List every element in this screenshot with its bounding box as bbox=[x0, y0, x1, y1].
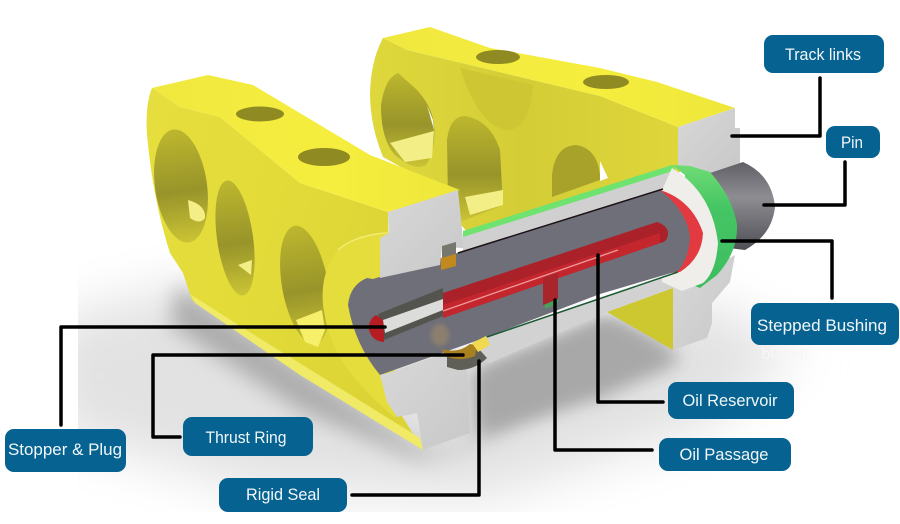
upper section block bbox=[380, 190, 463, 278]
lower bushing strip bbox=[467, 272, 708, 363]
pin section bbox=[348, 189, 690, 375]
front link side holes bbox=[147, 126, 215, 246]
stopper and plug bbox=[383, 299, 443, 333]
leader line: pin bbox=[764, 162, 845, 205]
pin top line bbox=[458, 189, 663, 253]
leader line: stepped bushing bbox=[722, 241, 832, 298]
label: Stepped Bushing bbox=[751, 303, 899, 345]
label: Track links: Track links bbox=[785, 45, 861, 64]
leader line: oil passage bbox=[555, 300, 652, 450]
label: Stopper and Plug bbox=[5, 429, 126, 472]
front link top holes bbox=[236, 106, 284, 122]
thrust ring bbox=[442, 344, 477, 359]
lower section block bbox=[380, 352, 470, 450]
red pin ring bbox=[660, 190, 703, 274]
right lower gray block bbox=[673, 255, 735, 350]
tan blur bbox=[431, 324, 449, 346]
back link side face bbox=[370, 38, 680, 235]
rigid seal bbox=[472, 336, 490, 352]
oil reservoir bbox=[443, 222, 668, 318]
label: Pin bbox=[826, 126, 880, 158]
front track link bbox=[147, 75, 460, 450]
background shadow bbox=[50, 285, 800, 500]
label: Oil Reservoir bbox=[668, 382, 794, 419]
back link holes bbox=[476, 50, 520, 64]
label: Oil Reservoir: Oil Reservoir bbox=[682, 391, 778, 410]
leader line: thrust ring bbox=[153, 355, 463, 437]
front gray section bbox=[380, 190, 490, 450]
oil passage bbox=[543, 273, 558, 305]
back link end face bbox=[678, 108, 740, 173]
floor under bushing bbox=[470, 315, 680, 432]
back link top face bbox=[383, 27, 735, 127]
label: Rigid Seal bbox=[219, 478, 347, 512]
pin body bbox=[348, 190, 690, 375]
green top strip bbox=[463, 165, 676, 237]
yellow triangle below bushing bbox=[607, 288, 673, 350]
front link bottom strip bbox=[190, 294, 423, 450]
label: Thrust Ring bbox=[183, 417, 313, 456]
label: Stepped Bushing: Stepped Bushing bbox=[757, 316, 887, 335]
ghost text: bUSHI bbox=[761, 346, 809, 363]
label: Track links bbox=[764, 35, 884, 73]
leader line: stopper and plug bbox=[61, 327, 385, 425]
leader line: track links bbox=[732, 78, 820, 136]
green bushing ring bbox=[672, 165, 737, 288]
label: Stopper and Plug: Stopper & Plug bbox=[8, 440, 122, 459]
pin cylinder end bbox=[710, 162, 775, 250]
white bushing ring bbox=[662, 168, 718, 291]
upper seal bbox=[442, 242, 456, 258]
leader line: oil reservoir bbox=[598, 255, 663, 402]
front link boss bbox=[323, 233, 395, 418]
front link side face bbox=[147, 88, 423, 450]
leader line: rigid seal bbox=[352, 361, 479, 495]
red plug ring bbox=[369, 315, 384, 342]
stopper dark band bbox=[378, 288, 443, 340]
back track link bbox=[370, 27, 735, 235]
bushing section bbox=[458, 108, 775, 432]
label: Oil Passage bbox=[659, 438, 791, 471]
front link top face bbox=[152, 75, 460, 212]
label: Pin: Pin bbox=[841, 133, 863, 152]
upper bushing strip bbox=[458, 168, 680, 253]
label: Oil Passage: Oil Passage bbox=[680, 445, 768, 464]
label: Rigid Seal: Rigid Seal bbox=[246, 485, 320, 504]
pin bottom green line bbox=[487, 272, 678, 337]
thrust ring gray base bbox=[447, 347, 487, 370]
label: Thrust Ring: Thrust Ring bbox=[206, 428, 286, 447]
